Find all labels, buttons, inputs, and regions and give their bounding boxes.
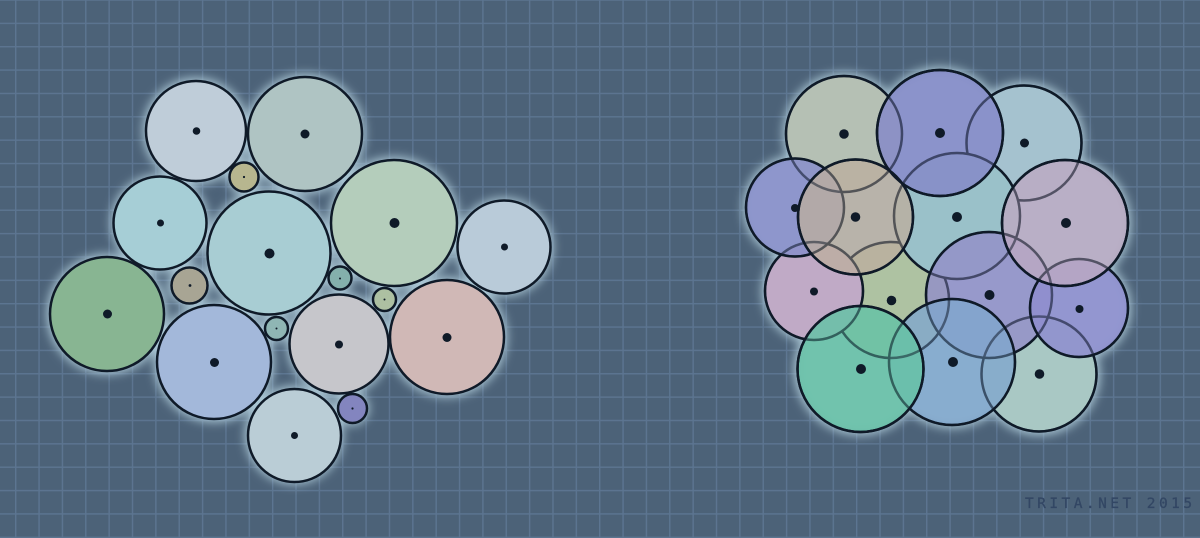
circle 13: [265, 317, 288, 340]
circle C: [966, 86, 1082, 200]
circle I: [833, 242, 949, 358]
circle 6: [331, 160, 457, 286]
circle 9: [172, 268, 208, 304]
glow: overlapping circles: [743, 67, 1131, 435]
top outlines: [798, 70, 1128, 432]
circle 8: [50, 257, 164, 371]
circle E: [798, 160, 913, 274]
overlap arcs: [746, 76, 1128, 432]
circle L: [798, 306, 924, 432]
circle 2: [248, 77, 362, 191]
circle H: [765, 242, 863, 340]
circle 16: [248, 389, 341, 482]
circle 7: [458, 200, 550, 294]
circle 11: [373, 288, 396, 311]
circle J: [926, 232, 1052, 358]
circle 5: [208, 192, 330, 314]
circle 15: [390, 280, 504, 394]
panel: packed circles: [47, 74, 553, 484]
panel: overlapping circles: [743, 67, 1131, 435]
circle D: [746, 158, 844, 256]
circle 10: [328, 266, 352, 290]
circle K: [1030, 259, 1128, 357]
circle 17: [338, 394, 367, 423]
circle 12: [157, 305, 271, 419]
circle G: [1002, 160, 1128, 286]
circle 1: [146, 81, 246, 181]
center dots: [791, 128, 1084, 379]
circle A: [786, 76, 902, 192]
credit text: TRITA.NET 2015: [1025, 496, 1196, 512]
circle F: [894, 153, 1020, 279]
circle 3: [230, 162, 258, 192]
circle N: [982, 316, 1096, 432]
circle M: [889, 299, 1015, 425]
circle 4: [114, 176, 206, 270]
circle B: [877, 70, 1003, 196]
glow: packed circles: [47, 74, 553, 484]
circle 14: [290, 294, 388, 394]
